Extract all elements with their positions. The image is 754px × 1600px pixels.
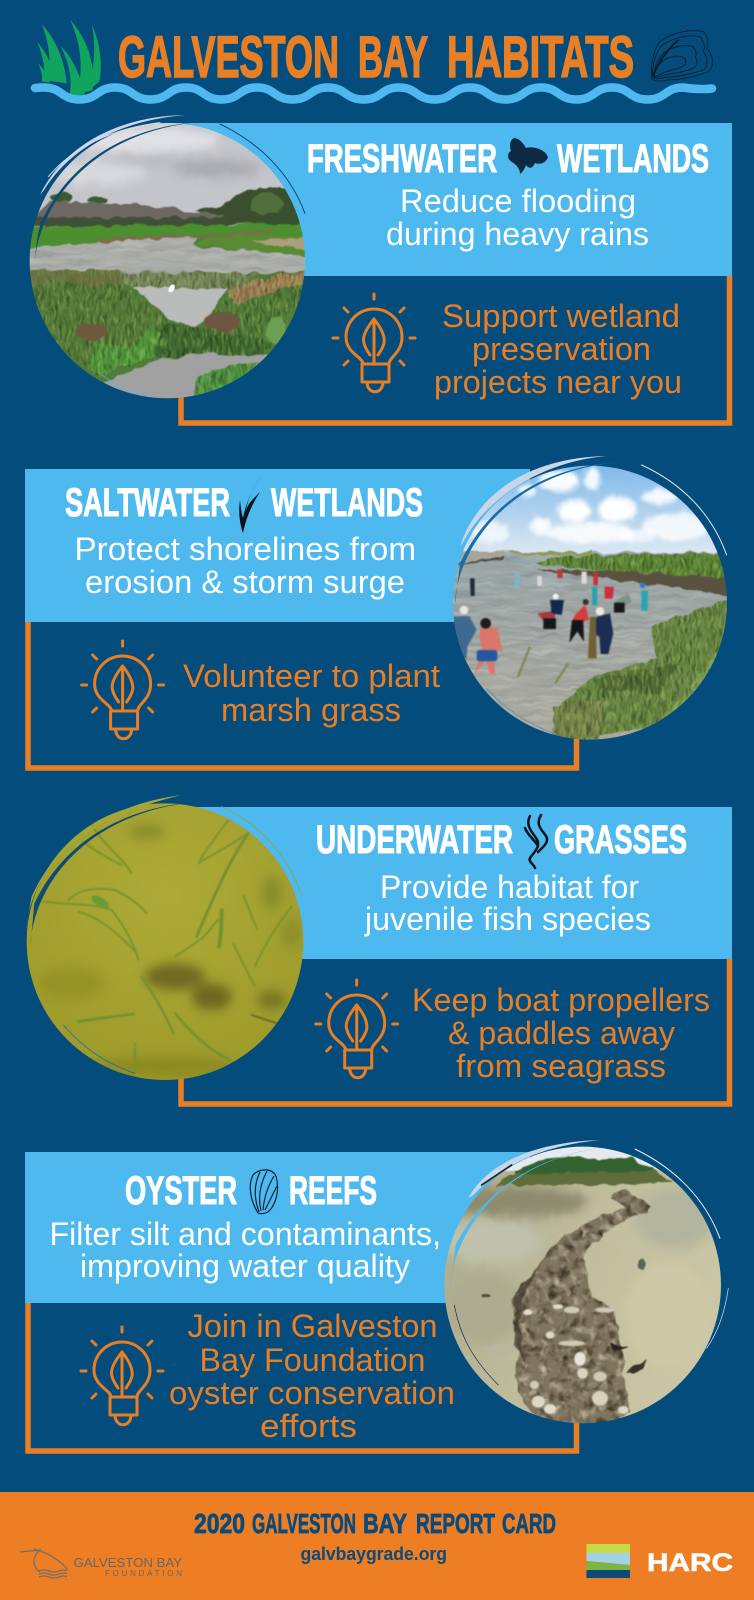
- volunteers: [452, 569, 648, 683]
- action text: marsh grass: [221, 692, 401, 728]
- heading: [65, 475, 423, 533]
- logo: HARC: [586, 1544, 733, 1578]
- action text: [183, 658, 440, 728]
- heading: FRESHWATER: [307, 137, 497, 181]
- icon: lightbulb with leaf: [316, 980, 398, 1078]
- photo: oyster reef line in bay: [444, 1140, 729, 1424]
- heading band: [160, 123, 732, 276]
- logo: Galveston Bay Foundation: [20, 1549, 182, 1578]
- heading: UNDERWATER: [316, 818, 513, 862]
- benefit text: Reduce flooding: [400, 183, 636, 219]
- photo: volunteers planting marsh grass: [453, 456, 728, 740]
- action text: from seagrass: [456, 1048, 666, 1084]
- benefit text: [364, 869, 651, 937]
- icon: lightbulb with leaf: [333, 294, 415, 392]
- logo: Galveston Bay Foundation: FOUNDATION: [105, 1569, 182, 1578]
- title: GALVESTON: [118, 25, 339, 90]
- photo: freshwater wetland pond: [30, 115, 306, 398]
- photo edge brush swooshes: [450, 1140, 728, 1385]
- report card title: CARD: [502, 1508, 556, 1539]
- action text: [169, 1308, 455, 1444]
- heading: [307, 137, 709, 181]
- panel: oyster reefs: [25, 1135, 735, 1451]
- report card title: GALVESTON: [252, 1508, 356, 1539]
- heading band: [25, 1152, 530, 1303]
- benefit text: erosion & storm surge: [85, 564, 405, 600]
- heading: REEFS: [289, 1169, 377, 1213]
- action frame: [28, 622, 576, 768]
- benefit text: juvenile fish species: [364, 901, 651, 937]
- benefit text: Filter silt and contaminants,: [50, 1216, 441, 1252]
- header: title with grass, oyster and wave: [35, 19, 713, 100]
- benefit text: [50, 1216, 441, 1284]
- photo: submerged seagrass: [26, 795, 304, 1080]
- panel: saltwater wetlands: [25, 450, 740, 768]
- benefit text: [386, 183, 649, 252]
- action frame: [181, 276, 730, 423]
- title: HABITATS: [447, 25, 634, 90]
- action text: Support wetland: [442, 298, 680, 334]
- heading: WETLANDS: [271, 481, 423, 525]
- icon: green marsh grass: [37, 19, 101, 96]
- logo: HARC: HARC: [647, 1549, 733, 1577]
- photo edge brush swooshes: [35, 115, 305, 395]
- title: [118, 25, 634, 90]
- heading: [125, 1169, 377, 1214]
- action text: [434, 298, 682, 400]
- wave: [35, 88, 712, 100]
- icon: lightbulb with leaf: [82, 641, 164, 739]
- action text: Keep boat propellers: [412, 982, 710, 1018]
- action text: Bay Foundation: [200, 1342, 426, 1378]
- report card title: 2020: [194, 1508, 245, 1539]
- icon: lightbulb with leaf: [81, 1327, 163, 1425]
- action text: [412, 982, 710, 1084]
- action frame: [181, 959, 730, 1104]
- panel: underwater grasses: [15, 790, 732, 1104]
- icon: fish: [508, 138, 548, 174]
- heading: SALTWATER: [65, 481, 230, 525]
- heading: [316, 815, 687, 868]
- action text: oyster conservation: [169, 1375, 455, 1411]
- logo: Galveston Bay Foundation: GALVESTON BAY: [74, 1555, 182, 1570]
- icon: oyster shell: [651, 31, 713, 81]
- benefit text: during heavy rains: [386, 216, 649, 252]
- heading: GRASSES: [554, 818, 687, 862]
- action text: preservation: [472, 331, 651, 367]
- action text: & paddles away: [448, 1015, 675, 1051]
- icon: wavy seagrass: [525, 815, 547, 868]
- action frame: [28, 1303, 576, 1451]
- panel: freshwater wetlands: [20, 110, 732, 423]
- footer: [0, 1492, 754, 1600]
- action text: Join in Galveston: [188, 1308, 438, 1344]
- benefit text: improving water quality: [80, 1248, 410, 1284]
- report card title: [194, 1508, 556, 1539]
- benefit text: Protect shorelines from: [74, 531, 416, 567]
- report card title: REPORT: [416, 1508, 495, 1539]
- benefit text: [74, 531, 416, 600]
- title: BAY: [358, 25, 428, 90]
- action text: efforts: [260, 1408, 357, 1444]
- photo edge brush swooshes: [26, 795, 302, 1073]
- website: galvbaygrade.org: [300, 1544, 447, 1564]
- oyster shells: [523, 1304, 629, 1414]
- report card title: BAY: [363, 1508, 407, 1539]
- heading band: [25, 469, 530, 622]
- icon: marsh grass blade: [239, 475, 262, 533]
- photo edge brush swooshes: [455, 456, 727, 734]
- action text: projects near you: [434, 364, 682, 400]
- heading band: [160, 807, 732, 959]
- action text: Volunteer to plant: [183, 658, 440, 694]
- icon: oyster shell: [250, 1170, 278, 1214]
- footer band: [0, 1492, 754, 1600]
- benefit text: Provide habitat for: [380, 869, 639, 905]
- heading: OYSTER: [125, 1169, 237, 1213]
